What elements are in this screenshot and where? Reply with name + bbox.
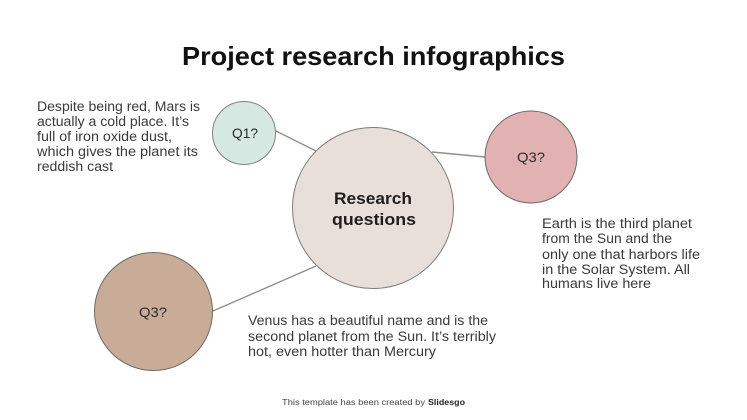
node: Q3 right: Q3? [517, 149, 545, 165]
text block: Earth: Earth is the third planet [542, 216, 692, 231]
connector lines [213, 131, 485, 311]
text block: Earth: humans live here [542, 276, 651, 291]
node: Q3 left: Q3? [139, 304, 167, 320]
node: Q1: Q1? [232, 125, 258, 141]
footer credit [282, 398, 465, 407]
text block: Earth: only one that harbors life [542, 247, 700, 262]
node: central research questions [292, 128, 454, 288]
footer credit: Slidesgo [428, 398, 465, 407]
title: Project research infographics [182, 41, 565, 71]
text block: Venus: Venus has a beautiful name and is the [248, 313, 488, 328]
text block: Mars: full of iron oxide dust, [37, 129, 172, 144]
text block: Mars [36, 99, 200, 174]
node: central research questions: Research [334, 189, 412, 208]
text block: Venus [248, 313, 496, 359]
text block: Mars: Despite being red, Mars is [37, 99, 200, 114]
text block: Earth: in the Solar System. All [542, 262, 690, 277]
text block: Mars: actually a cold place. It’s [37, 114, 189, 129]
text block: Earth: from the Sun and the [542, 231, 672, 246]
text block: Mars: reddish cast [37, 159, 113, 174]
node: Q3 left [94, 252, 212, 370]
node: Q3 right [485, 111, 577, 203]
node: central research questions: questions [332, 210, 416, 229]
node: Q1 [212, 102, 276, 164]
text block: Venus: second planet from the Sun. It’s terribly [248, 329, 496, 344]
text block: Venus: hot, even hotter than Mercury [248, 344, 436, 359]
footer credit: This template has been created by [282, 398, 425, 407]
text block: Earth [542, 216, 700, 291]
text block: Mars: which gives the planet its [36, 144, 198, 159]
